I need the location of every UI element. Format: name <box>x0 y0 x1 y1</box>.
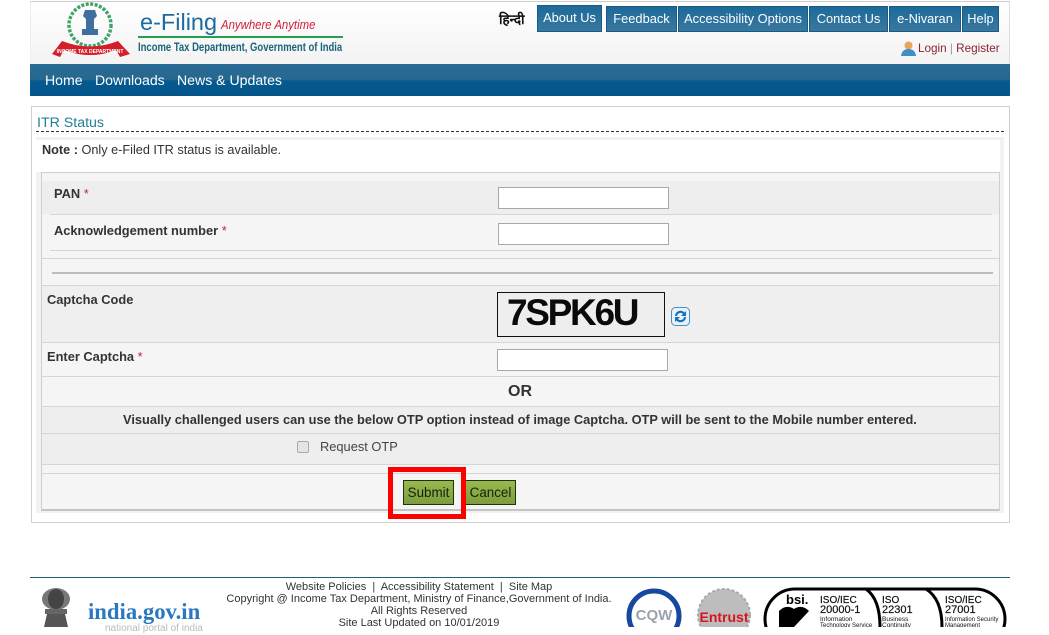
badge: BSI ISO certifications: Information Security <box>945 617 998 623</box>
heading rule <box>36 131 1004 132</box>
top nav: e-Nivaran <box>889 6 961 32</box>
rights reserved: All Rights Reserved <box>371 605 467 617</box>
OR separator: OR <box>508 383 532 400</box>
india.gov.in logo: india.gov.in <box>88 599 200 624</box>
label: Enter Captcha: Enter Captcha * <box>47 349 143 364</box>
button: Submit <box>403 480 454 505</box>
copyright: Copyright @ Income Tax Department, Ministry of Finance,Government of India. <box>226 593 612 605</box>
main nav: Downloads: Downloads <box>95 72 165 88</box>
main nav bar <box>30 64 1010 96</box>
badge: CQW <box>626 588 682 627</box>
PAN row background <box>42 181 999 214</box>
label: PAN: PAN * <box>54 186 89 201</box>
badge: BSI ISO certifications: Business <box>882 616 909 623</box>
language link: Hindi: हिन्दी <box>499 12 525 27</box>
button: Cancel <box>465 480 516 505</box>
request OTP row background <box>42 434 999 464</box>
top nav: Accessibility Options <box>678 6 808 32</box>
logo tagline: Anywhere Anytime <box>221 18 315 32</box>
label: Request OTP: Request OTP <box>320 439 398 454</box>
top nav: Contact Us <box>809 6 888 32</box>
top nav: Feedback: Feedback <box>613 11 670 26</box>
checkbox: Request OTP <box>297 441 309 453</box>
button: Cancel: Cancel <box>470 485 511 500</box>
header band <box>30 1 1010 64</box>
captcha row background <box>42 286 999 342</box>
callout: red highlight on Submit <box>388 467 466 519</box>
OTP message row background <box>42 407 999 433</box>
footer rule <box>30 577 1010 578</box>
icon: user <box>901 42 916 56</box>
OTP instruction: Visually challenged users can use the below OTP option instead of image Captcha. OTP will be sent to the Mobile number entered. <box>123 412 917 427</box>
badge: BSI ISO certifications: ISO <box>882 595 899 606</box>
top nav: Feedback <box>606 6 677 32</box>
badge: BSI ISO certifications: ISO/IEC <box>820 595 857 606</box>
badge: BSI ISO certifications: 22301 <box>882 604 913 616</box>
top nav: Help <box>962 6 999 32</box>
last updated: Site Last Updated on 10/01/2019 <box>339 617 499 629</box>
main nav: Home: Home <box>45 72 83 88</box>
badge: Entrust: Entrust <box>700 609 749 625</box>
form <box>41 172 1000 511</box>
label: Captcha Code: Captcha Code <box>47 292 133 307</box>
logo divider <box>138 36 343 38</box>
top nav: About Us: About Us <box>543 10 596 25</box>
top nav: Contact Us: Contact Us <box>817 11 880 26</box>
badge: BSI ISO certifications: 27001 <box>945 604 976 616</box>
top nav: Help: Help <box>967 11 994 26</box>
logo title: e-Filing: e-Filing <box>140 9 217 35</box>
badge: BSI ISO certifications <box>764 588 1006 627</box>
note side shadow <box>36 137 1004 513</box>
input: PAN <box>498 187 669 209</box>
badge: BSI ISO certifications: 20000-1 <box>820 604 860 616</box>
input: Enter Captcha <box>497 349 668 371</box>
main nav: News & Updates: News & Updates <box>177 72 282 88</box>
icon: national emblem <box>42 588 70 627</box>
icon: refresh captcha <box>671 307 690 326</box>
footer links: Website Policies | Accessibility Statement | Site Map <box>286 581 552 593</box>
badge: CQW: CQW <box>636 607 673 624</box>
department name: Income Tax Department, Government of India <box>138 40 342 54</box>
login and register links: Login | Register <box>918 42 1000 55</box>
button: Submit: Submit <box>408 485 449 500</box>
icon: income tax department logo <box>52 2 130 57</box>
icon: income tax department logo: INCOME TAX DEPARTMENT <box>57 49 123 55</box>
badge: Entrust <box>697 588 751 627</box>
note: Note : Only e-Filed ITR status is available. <box>42 143 281 157</box>
top nav: Accessibility Options: Accessibility Options <box>684 11 802 26</box>
note <box>36 140 1000 172</box>
input: Acknowledgement number <box>498 223 669 245</box>
panel: ITR status <box>31 106 1010 523</box>
label: Acknowledgement number: Acknowledgement number * <box>54 223 227 238</box>
panel heading: ITR Status <box>37 115 104 131</box>
captcha image: 7SPK6U <box>507 292 637 333</box>
badge: BSI ISO certifications: Information <box>820 616 853 623</box>
top nav: About Us <box>537 5 602 32</box>
badge: BSI ISO certifications: bsi. <box>786 592 808 607</box>
badge: BSI ISO certifications: ISO/IEC <box>945 595 982 606</box>
india.gov.in tagline: national portal of india <box>105 623 203 634</box>
top nav: e-Nivaran: e-Nivaran <box>897 11 953 26</box>
